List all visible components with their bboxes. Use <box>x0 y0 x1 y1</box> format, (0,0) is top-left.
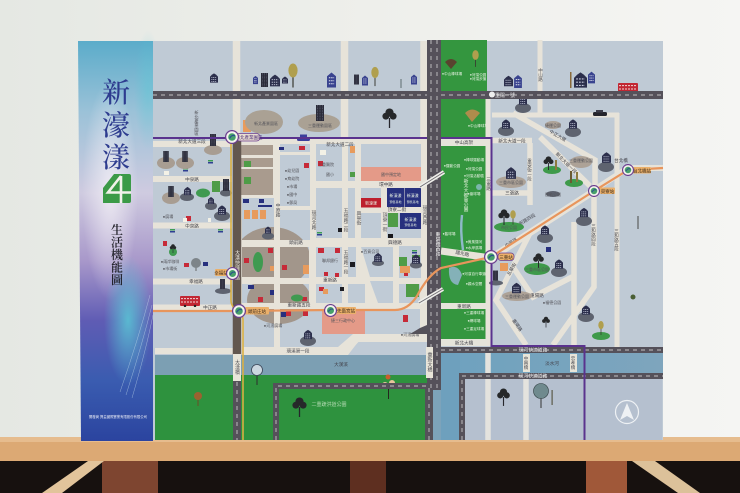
road labels: 頂寮二街 <box>388 206 407 213</box>
small POI icons: ●兩岸咖啡 <box>161 258 179 264</box>
subtitle: living function map: 能 <box>111 260 123 274</box>
station: New Taipei Industrial Park <box>226 131 263 143</box>
river-side trees <box>194 364 553 417</box>
trees west <box>170 244 201 271</box>
label: Chongxin bridge <box>426 347 433 378</box>
small POI icons <box>161 120 561 337</box>
salmon block: Taipower land: 國中預定地 <box>381 171 401 177</box>
label: Huanhe expressway upper: 環河快速道路 <box>519 346 548 354</box>
park POI list: ●河濱活動區 <box>464 173 484 178</box>
road labels: 重新路 <box>323 276 337 284</box>
small POI icons: 聯邦銀行 <box>322 257 338 263</box>
road labels: 幸福路 <box>189 278 203 285</box>
tree: teal east <box>534 384 548 408</box>
panel: east bank river and land <box>441 353 663 440</box>
road labels: 環河西路 <box>422 205 427 226</box>
red double-decker bus west <box>180 296 200 307</box>
small POI icons: ●郵局 <box>287 199 297 205</box>
park POI list: ●棒球運動場 <box>464 157 484 162</box>
site: navy block C <box>400 213 421 229</box>
site: navy block A: 預售基地 <box>389 199 402 204</box>
label: New Taipei bridge strip <box>441 339 487 346</box>
label: Tamsui river: 淡水河 <box>545 360 559 366</box>
label: north park: ●河濱步道 <box>470 76 487 81</box>
label: Dahan road vertical: 大漢快速道路 <box>234 249 240 281</box>
subtitle: living function map: 活 <box>111 234 123 250</box>
road labels east: 重陽路 <box>530 292 544 299</box>
road labels: 環河北路 <box>310 210 316 231</box>
road labels: 興寧街 <box>356 210 361 227</box>
site: navy block B: 新濠漾 <box>407 192 419 198</box>
road labels east: 重安街一段 <box>527 158 532 183</box>
road labels: 新北產業園區 <box>194 109 200 136</box>
small landmark labels: 三重市區公園 <box>499 179 523 185</box>
tree: dark round <box>382 108 397 128</box>
road labels east: 五華街 <box>505 261 518 277</box>
small landmark labels: 三重運動公園 <box>505 293 529 299</box>
label: New Taipei bridge strip: 新北大橋 <box>455 340 474 346</box>
logo: green 4 <box>103 174 131 203</box>
small POI icons: ●國中 <box>287 191 297 197</box>
road labels: 五福路一段 <box>342 250 348 275</box>
landmark: New Taipei industrial park <box>245 110 283 134</box>
label: river: 大漢溪 <box>334 361 348 368</box>
park POI list: ●三重棒球場 <box>464 310 484 315</box>
road labels east: 重陽路 <box>510 317 524 333</box>
site: navy block A <box>387 188 404 207</box>
label: Chongyang bridge vertical: 重陽橋西路 <box>434 231 440 257</box>
road labels east: 重新路四段 <box>514 211 537 230</box>
ramps crossing highway <box>420 172 444 187</box>
landmark: tower on beige disc <box>298 105 340 132</box>
panel: title sidebar <box>78 30 162 441</box>
beige discs west <box>157 134 222 204</box>
buildings: top row west <box>210 64 417 88</box>
tree: brown <box>194 392 202 406</box>
small POI icons: ●市場街 <box>163 265 177 271</box>
road labels east: 新北大道一段 <box>498 138 526 144</box>
label: north park <box>442 71 488 128</box>
road labels <box>178 109 427 354</box>
park POI list: ●籃球場 <box>443 231 456 236</box>
station: Xingfu: 幸福站 <box>214 270 228 276</box>
road labels: 五福路二段 <box>342 208 348 233</box>
MRT gold line <box>231 138 243 440</box>
panel: west bank river and park <box>155 355 459 440</box>
road labels: 頂寮一街 <box>382 212 387 233</box>
road labels east: 台北橋 <box>614 157 628 164</box>
salmon block: Sanchong shopping: 捷三行政中心 <box>331 317 355 323</box>
tree: orange blossoms <box>382 374 395 399</box>
road labels east: 三張路 <box>505 190 519 196</box>
red double-decker bus east <box>618 83 638 94</box>
green plot <box>388 213 398 227</box>
site: navy block C: 預售基地 <box>404 222 417 227</box>
station: Taipei Bridge: 台北橋站 <box>633 167 651 174</box>
road labels: 中正路 <box>203 304 217 311</box>
tree: dark in park <box>292 397 307 417</box>
small POI icons: ●河濱廣場 <box>264 322 282 328</box>
small POI icons: 三重醫院 <box>318 161 334 167</box>
road labels: 中泉路 <box>185 176 199 183</box>
station: Cailiao: 菜寮站 <box>601 188 615 195</box>
station: Touqianzhuang <box>233 305 269 317</box>
station: Taipei Bridge <box>623 165 651 175</box>
salmon block: Sanchong shopping <box>322 309 365 334</box>
park POI list: ●網球場 <box>468 318 481 323</box>
road labels: 中泉路 <box>185 222 199 230</box>
road labels: 新北大道三段 <box>178 138 206 145</box>
road labels east: 三重路 <box>486 177 492 192</box>
road labels east: 新北大道一段 <box>554 151 579 175</box>
icon group: project sites <box>361 188 421 238</box>
site: red sign: 新濠漾 <box>365 200 377 206</box>
road labels east: 中興路 <box>504 236 519 249</box>
salmon block: Taipower land <box>361 167 421 181</box>
park POI list: ●親水空間 <box>466 281 483 286</box>
small POI icons: 國小 <box>326 171 334 177</box>
park POI list: ●河濱公園 <box>466 166 483 171</box>
title: project name: 濠 <box>102 110 130 142</box>
site: navy block C: 新濠漾 <box>404 216 416 222</box>
station: Xianse Temple: 先嗇宮站 <box>337 308 355 314</box>
label: Zhongxiao bridge: 忠孝橋 <box>570 356 576 371</box>
buildings on slate discs <box>184 179 420 339</box>
small landmark labels: 運動公園 <box>545 191 561 197</box>
label: Dahan bridge: 大漢橋 <box>234 359 240 376</box>
building clusters: west riverside <box>157 64 422 346</box>
small POI icons: ●市場 <box>287 183 297 189</box>
small landmark labels <box>499 122 593 299</box>
park POI list <box>443 157 486 331</box>
small POI icons: ●河濱廣場 <box>401 331 419 337</box>
small landmark labels: 三重運動公園 <box>569 157 593 163</box>
tan districts <box>242 227 309 324</box>
station: Sanchong <box>485 251 514 263</box>
road labels: 興德路 <box>388 239 402 246</box>
station: Xianse Temple <box>325 305 356 316</box>
subtitle: living function map: 圖 <box>111 273 123 287</box>
station: Touqianzhuang: 頭前庄站 <box>248 308 266 315</box>
label: Chongxin road strip: 重新路 <box>457 303 471 310</box>
shelf under the board <box>0 437 740 493</box>
car: purple <box>297 134 310 141</box>
label: Guoguang road: 國光路 <box>455 249 470 258</box>
north arrow <box>616 400 638 424</box>
park POI list: ●三重足球場 <box>464 326 484 331</box>
label: north park: ●中山棒球場 <box>468 123 488 128</box>
label: Chongxin road strip <box>441 303 487 310</box>
station: Sanchong: 三重站 <box>499 254 513 261</box>
MRT orange line <box>153 168 663 311</box>
site: navy block A: 新濠漾 <box>390 192 402 198</box>
label: Huanhe expressway lower: 環河快速道路 <box>519 372 548 380</box>
tree: dark east <box>497 388 510 406</box>
road labels east: 中山路 <box>538 67 544 83</box>
park POI list: ●運動公園 <box>444 163 461 168</box>
small POI icons: ●幼兒園 <box>285 167 299 173</box>
road labels: 頭前路 <box>289 239 303 246</box>
label: north park: ●中山棒球場 <box>442 71 462 76</box>
road labels east: 中正大道 <box>548 128 568 144</box>
park POI list: ●微風運河 <box>466 239 483 244</box>
road labels: 中原路 <box>274 202 280 219</box>
small POI icons: ●育幼院 <box>285 175 299 181</box>
small POI icons: ●福德公園 <box>543 299 561 305</box>
subtitle: living function map <box>111 222 124 287</box>
label: north park: ●河濱公園 <box>470 72 487 77</box>
panel: left street grid <box>153 41 427 355</box>
site: navy block B: 預售基地 <box>407 199 419 204</box>
landmark: New Taipei industrial park: 新北產業園區 <box>254 120 278 126</box>
west strips <box>153 144 345 351</box>
green park markers <box>169 188 303 302</box>
station: Xingfu <box>214 268 238 279</box>
trees east <box>472 50 638 335</box>
small POI icons: ●百貨公司 <box>361 248 379 254</box>
small landmark labels: 三重市區公園 <box>525 266 549 272</box>
label: Zhongxing bridge: 中興橋 <box>523 355 529 371</box>
road labels: 重新路五段 <box>288 302 311 308</box>
label: Chongxin bridge: 重新大橋 <box>426 351 432 373</box>
station: Cailiao <box>589 186 615 196</box>
small landmark labels: 市民公園 <box>501 224 517 230</box>
label: metropolitan park: 新北大都會公園 <box>462 177 468 213</box>
tree: small dark east <box>552 390 553 405</box>
title: project name <box>102 77 130 174</box>
panel: map base <box>153 41 663 440</box>
title: project name: 新 <box>102 77 130 109</box>
road labels east: 三和路四段 <box>591 224 596 248</box>
landmark discs east <box>489 103 614 322</box>
label: Flower highway No.1 <box>489 92 515 99</box>
right-side street network <box>297 40 663 347</box>
landmark: tower on beige disc: 三重運動園區 <box>308 122 332 128</box>
label: Zhongshan viaduct strip: 中山高架 <box>455 139 474 146</box>
tree: pale <box>252 364 262 385</box>
label: Dahan bridge <box>233 354 241 381</box>
small landmark labels: 捷運公園 <box>545 122 561 128</box>
subtitle: living function map: 生 <box>111 222 123 237</box>
subtitle: living function map: 機 <box>111 247 124 262</box>
label: Zhongxiao bridge <box>570 354 577 372</box>
MRT purple ring line <box>153 138 584 440</box>
road labels: 環中路 <box>379 181 393 188</box>
station: New Taipei Industrial Park: 新北產業園區 <box>236 134 263 141</box>
label: Zhongshan viaduct strip <box>441 138 487 146</box>
site: navy block B <box>404 188 421 207</box>
road labels: 新北大道二段 <box>326 141 354 148</box>
road labels east: 三和路五段 <box>614 229 620 253</box>
elevated highways <box>153 40 663 440</box>
road labels: 環溪第一段 <box>287 348 310 354</box>
small POI icons: ●廣場 <box>163 213 173 219</box>
slate discs west <box>180 190 422 346</box>
baseball fields <box>445 59 480 122</box>
label: park: 二重疏洪道公園 <box>311 401 347 408</box>
label: Flower highway No.1: 重陽一號 <box>495 92 515 99</box>
park POI list: ●河濱自行車道 <box>462 271 486 276</box>
label: Zhongxing bridge <box>523 354 530 372</box>
title: project name: 漾 <box>102 142 130 174</box>
buildings east <box>493 72 611 315</box>
car <box>593 110 607 116</box>
park POI list: ●水岸廣場 <box>466 245 483 250</box>
developer credit: 開發商 興益國際實業有限股份有限公司 <box>89 414 147 419</box>
park POI list: ●壘球場 <box>468 191 481 196</box>
panel: central Sanchong green park <box>441 40 488 339</box>
road labels east <box>486 67 628 333</box>
